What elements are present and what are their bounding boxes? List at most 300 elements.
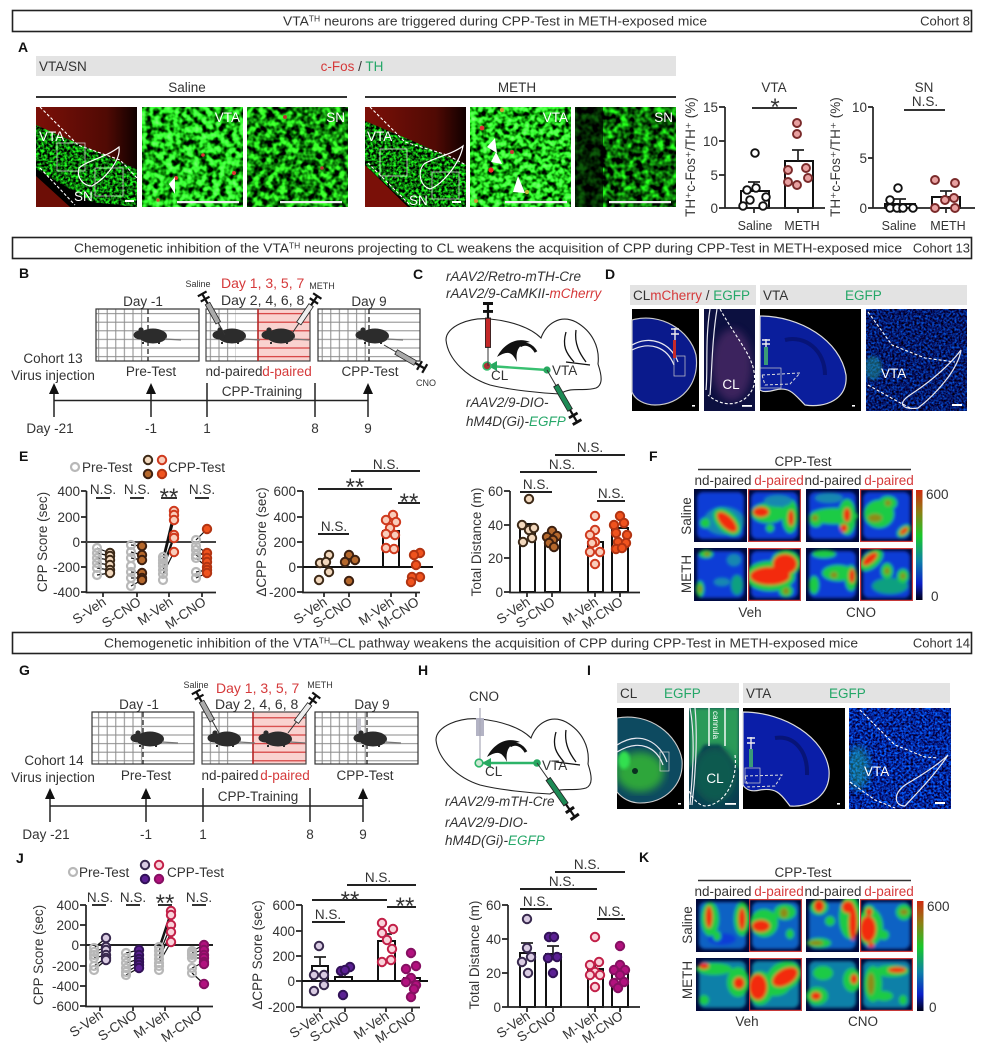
image: CL magnified with cannula [689,708,739,809]
panel F: occupancy heatmaps, cohort 13: nd-paired [694,473,752,488]
image: METH SN: SN [654,110,673,125]
heatmap: saline CNO nd-paired [806,899,859,952]
chart: CPP score: M-CNO [162,594,209,632]
chart: CPP score: N.S. [87,890,113,905]
chart: total distance: N.S. [598,904,624,919]
legend: CPP-Test [168,460,225,475]
chart: total distance: 0 [495,585,503,600]
chart: delta CPP score: N.S. [365,870,391,885]
chart: total distance: S-CNO [513,594,558,631]
chart: CPP score: 400 [57,484,80,499]
image: saline overview: VTA [39,129,64,144]
chart: CPP score: S-CNO [99,594,144,631]
panel B: experimental timeline, cohort 13: Pre-Test [126,364,176,379]
colour scale: 0 [931,589,939,604]
panel G: experimental timeline, cohort 14: CPP-Training [218,789,298,804]
chart: CPP score: CPP Score (sec) [35,492,50,592]
chamber: pre-test [92,712,194,764]
panel F: occupancy heatmaps, cohort 13: Veh [738,605,762,620]
chart: CPP score: M-Veh [135,594,176,628]
panel G: experimental timeline, cohort 14: Day -1 [119,697,159,712]
chart: total distance: M-CNO [579,594,626,632]
panel F: occupancy heatmaps, cohort 13: CPP-Test [774,454,832,469]
image: METH VTA: VTA [543,110,568,125]
heatmap: saline Veh d-paired [748,489,801,542]
panel K: occupancy heatmaps, cohort 14: METH [680,961,695,999]
image: saline overview: SN [74,189,93,204]
panel H: cannula and viral schematic, cohort 14: VTA [542,758,567,773]
panel A: micrographs: c-Fos / TH [321,59,383,74]
panel I: CL and VTA EGFP histology: EGFP [829,686,866,701]
image: VTA magnified [866,309,967,411]
chart: delta CPP score: ** [400,489,418,516]
panel G: experimental timeline, cohort 14: Virus injection [11,770,95,785]
chart: CPP score: 200 [57,510,80,525]
chart: CPP score: 400 [56,898,79,913]
panel G: experimental timeline, cohort 14: G [19,662,30,678]
heading: cohort 13 banner: TH [289,242,300,250]
panel G: experimental timeline, cohort 14: Day -21 [22,827,70,842]
heading: cohort 13 banner: Cohort 13 [913,240,970,256]
chart: total distance: N.S. [598,486,624,501]
image: saline VTA [142,107,243,207]
chart: delta CPP score: ** [341,887,359,914]
image: VTA magnified [849,708,951,809]
panel F: occupancy heatmaps, cohort 13: F [649,448,658,464]
timeline [49,383,373,417]
chart: delta CPP score: -200 [269,585,296,600]
panel F: occupancy heatmaps, cohort 13: d-paired [754,473,804,488]
chart: total distance: N.S. [523,894,549,909]
panel C: viral injection schematic, cohort 13: rAAV2/9-CaMKII-mCherry [446,286,603,301]
panel D: CL and VTA EGFP histology: CLmCherry / EGFP [633,288,750,303]
heading: cohort 8 banner: Cohort 8 [920,14,970,28]
panel J: CPP score charts, cohort 14 [16,850,640,1046]
chart: SN double-positive percentage: 5 [859,151,867,166]
panel H: cannula and viral schematic, cohort 14 [418,662,591,848]
chart: CPP score: S-Veh [70,594,109,627]
chart: total distance [467,857,640,1046]
heatmap: METH CNO nd-paired [806,548,859,601]
chart: total distance: 40 [488,518,503,533]
panel G: experimental timeline, cohort 14 [11,662,418,842]
panel G: experimental timeline, cohort 14: Cohort 14 [24,753,84,768]
chart: delta CPP score: S-CNO [310,594,355,631]
heading: cohort 13 banner: neurons projecting to CL weakens the acquisition of CPP during CPP-Test in METH-exposed mice [300,240,902,256]
image: VTA magnified: VTA [864,764,889,779]
panel B: experimental timeline, cohort 13: d-paired [262,364,312,379]
cannula [476,708,484,764]
image: METH VTA [470,107,571,207]
panel D: CL and VTA EGFP histology [605,266,967,411]
chart: delta CPP score: ΔCPP Score (sec) [254,487,269,597]
panel A: micrographs: Saline [168,80,206,95]
panel B: experimental timeline, cohort 13 [11,265,436,436]
panel K: occupancy heatmaps, cohort 14: d-paired [864,884,914,899]
chart: delta CPP score: S-Veh [287,1008,326,1041]
heatmap: METH Veh d-paired [748,548,801,601]
panel H: cannula and viral schematic, cohort 14: CL [485,764,503,779]
image: VTA section [743,708,845,809]
heading: cohort 8 banner: VTA [283,14,307,28]
icon: saline syringe [192,689,223,735]
panel B: experimental timeline, cohort 13: Day 1, 3, 5, 7 [221,275,304,291]
panel G: experimental timeline, cohort 14: -1 [140,827,152,842]
panel B: experimental timeline, cohort 13: CPP-Test [341,364,399,379]
chart: total distance: 60 [486,898,501,913]
chart: SN double-positive percentage: TH⁺c-Fos⁺/TH⁺ (%) [828,97,843,217]
panel G: experimental timeline, cohort 14: 9 [359,827,367,842]
panel D: CL and VTA EGFP histology: VTA [763,288,788,303]
panel G: experimental timeline, cohort 14: Day 2, 4, 6, 8 [215,696,298,712]
chart: delta CPP score: 400 [273,510,296,525]
panel C: viral injection schematic, cohort 13: hM4D(Gi)-EGFP [466,414,566,429]
panel B: experimental timeline, cohort 13: Day -21 [26,421,74,436]
heading: cohort 14 banner: TH [319,636,330,646]
chart: CPP score: N.S. [90,482,116,497]
panel D: CL and VTA EGFP histology: D [605,266,615,282]
chart: total distance: N.S. [549,457,575,472]
chart: delta CPP score: 600 [272,898,295,913]
chart: CPP score: M-CNO [158,1007,205,1045]
chart: delta CPP score: N.S. [315,907,341,922]
chart: delta CPP score: 600 [273,484,296,499]
chart: VTA double-positive percentage: TH⁺c-Fos⁺/TH⁺ (%) [683,97,698,217]
icon: METH syringe [284,692,320,736]
image: saline overview [36,107,137,207]
panel I: CL and VTA EGFP histology [587,662,951,809]
chart: total distance: M-Veh [560,594,601,628]
panel K: occupancy heatmaps, cohort 14: Veh [735,1014,759,1029]
heatmap: METH Veh d-paired [749,958,802,1011]
chart: delta CPP score: 400 [272,924,295,939]
chart: delta CPP score: -200 [268,1000,295,1015]
heatmap: METH Veh nd-paired [696,958,749,1011]
panel F: occupancy heatmaps, cohort 13: d-paired [864,473,914,488]
panel G: experimental timeline, cohort 14: nd-paired [201,768,259,783]
chart: CPP score: -200 [52,959,79,974]
panel D: CL and VTA EGFP histology: EGFP [845,288,882,303]
chart: delta CPP score: M-CNO [375,594,422,632]
panel F: occupancy heatmaps, cohort 13 [649,448,949,620]
chart: delta CPP score [250,870,428,1046]
chart: CPP score: 0 [72,535,80,550]
data points: saline [739,149,770,210]
panel A: micrographs: VTA/SN [39,59,87,74]
panel B: experimental timeline, cohort 13: 1 [203,421,211,436]
panel H: cannula and viral schematic, cohort 14: H [418,662,428,678]
panel A: micrographs [18,39,676,208]
icon: saline syringe [198,291,229,337]
chart: CPP score: ** [156,890,174,917]
heatmap: METH CNO nd-paired [806,958,859,1011]
heading: cohort 8 banner [12,10,972,32]
chart: delta CPP score: 0 [288,560,296,575]
chart: CPP score: -400 [53,585,80,600]
chart: delta CPP score: 200 [272,949,295,964]
chart: CPP score: N.S. [186,890,212,905]
panel K: occupancy heatmaps, cohort 14: nd-paired [694,884,752,899]
chart: total distance: N.S. [574,857,600,872]
panel K: occupancy heatmaps, cohort 14: CNO [848,1014,878,1029]
chart: total distance: N.S. [577,440,603,455]
heatmap: METH CNO d-paired [860,548,913,601]
chart: VTA double-positive percentage: 10 [703,134,718,149]
image: CL magnified with cannula: cannula [711,711,720,740]
panel B: experimental timeline, cohort 13: 9 [364,421,372,436]
panel B: experimental timeline, cohort 13: METH [309,281,335,291]
chart: total distance: 60 [488,484,503,499]
chart: total distance: N.S. [523,477,549,492]
timeline [45,788,368,822]
icon: green syringe [533,760,579,820]
heatmap: saline Veh nd-paired [696,899,749,952]
panel H: cannula and viral schematic, cohort 14: CNO [469,689,499,704]
data points: METH [931,176,959,212]
panel K: occupancy heatmaps, cohort 14: nd-paired [804,884,862,899]
legend: Pre-Test [79,865,130,880]
panel E: CPP score charts, cohort 13 [19,440,640,632]
colour scale: 0 [929,1000,937,1015]
chart: VTA double-positive percentage: Saline [738,219,772,233]
chart: CPP score: CPP Score (sec) [31,905,46,1005]
chart: VTA double-positive percentage: * [770,94,780,121]
panel B: experimental timeline, cohort 13: -1 [145,421,157,436]
VTA to CL projection [482,762,537,764]
chart: total distance: S-CNO [514,1008,559,1045]
chart: VTA double-positive percentage [683,80,825,233]
heading: cohort 14 banner: –CL pathway weakens the acquisition of CPP during CPP-Test in METH-exposed mice [330,636,858,650]
legend [71,456,225,478]
panel C: viral injection schematic, cohort 13: CL [491,368,509,383]
chart: CPP score [35,482,216,632]
panel B: experimental timeline, cohort 13: CNO [416,378,436,388]
panel G: experimental timeline, cohort 14: Pre-Test [121,768,171,783]
image: saline SN: SN [326,110,345,125]
panel H: cannula and viral schematic, cohort 14: hM4D(Gi)-EGFP [445,833,545,848]
panel I: CL and VTA EGFP histology: EGFP [664,686,701,701]
chart: CPP score: S-Veh [67,1007,106,1040]
image: saline VTA: VTA [215,110,240,125]
panel K: occupancy heatmaps, cohort 14: CPP-Test [774,865,832,880]
panel A: micrographs: A [18,39,28,55]
image: VTA section [760,309,861,411]
heading: cohort 14 banner [12,632,972,654]
panel G: experimental timeline, cohort 14: 8 [306,827,314,842]
panel I: CL and VTA EGFP histology: I [587,662,591,678]
icon: green syringe [543,368,581,425]
panel J: CPP score charts, cohort 14: J [16,850,24,866]
panel C: viral injection schematic, cohort 13: rAAV2/Retro-mTH-Cre [446,269,581,284]
chart: delta CPP score: N.S. [321,519,347,534]
heading: cohort 13 banner [12,238,972,258]
panel G: experimental timeline, cohort 14: METH [307,680,333,690]
panel H: cannula and viral schematic, cohort 14: rAAV2/9-DIO- [445,815,528,830]
heatmap: saline CNO nd-paired [806,489,859,542]
panel G: experimental timeline, cohort 14: d-paired [260,768,310,783]
image: CL magnified with cannula: CL [706,771,724,786]
chart: delta CPP score: ** [396,893,414,920]
chart: CPP score: M-Veh [131,1007,172,1041]
chart: delta CPP score: ** [346,474,364,501]
panel C: viral injection schematic, cohort 13: rAAV2/9-DIO- [466,395,549,410]
chart: SN double-positive percentage: 10 [852,100,867,115]
panel B: experimental timeline, cohort 13: Saline [185,279,211,289]
icon: METH syringe [287,293,321,338]
chart: total distance: Total Distance (m) [469,488,484,596]
chart: delta CPP score: 200 [273,535,296,550]
VTA to CL projection [489,366,547,370]
panel B: experimental timeline, cohort 13: CPP-Training [222,384,302,399]
panel H: cannula and viral schematic, cohort 14: rAAV2/9-mTH-Cre [445,794,555,809]
colour scale: 600 [926,487,949,502]
panel A: micrographs: METH [498,80,536,95]
chart: CPP score: N.S. [124,482,150,497]
chart: CPP score: N.S. [120,890,146,905]
panel I: CL and VTA EGFP histology: CL [620,686,638,701]
heading: cohort 8 banner: TH [309,14,320,24]
chamber: CPP-training [206,309,310,361]
panel K: occupancy heatmaps, cohort 14: d-paired [754,884,804,899]
chart: CPP score: S-CNO [95,1007,140,1044]
chart: SN double-positive percentage: Saline [882,219,916,233]
chart: total distance: S-Veh [494,1008,533,1041]
image: VTA magnified: VTA [881,366,906,381]
image: METH overview: VTA [367,129,392,144]
chart: CPP score: -600 [52,999,79,1014]
panel B: experimental timeline, cohort 13: nd-paired [205,364,263,379]
panel G: experimental timeline, cohort 14: Saline [183,680,209,690]
chamber: CPP-training [202,712,306,764]
heading: cohort 14 banner: Cohort 14 [913,636,970,650]
chart: total distance: 20 [488,551,503,566]
panel G: experimental timeline, cohort 14: Day 1, 3, 5, 7 [216,680,299,696]
chart: CPP score: ** [160,484,178,511]
heatmap: saline Veh d-paired [749,899,802,952]
image: METH SN [575,107,676,207]
chamber: CPP-test [318,309,420,361]
heading: cohort 13 banner: Chemogenetic inhibition of the VTA [74,240,277,256]
panel B: experimental timeline, cohort 13: Cohort 13 [23,351,83,366]
image: CL section [632,309,699,411]
heatmap: METH Veh nd-paired [694,548,747,601]
chart: delta CPP score [254,457,433,632]
chart: total distance: M-CNO [579,1008,626,1046]
chart: delta CPP score: M-Veh [351,1008,392,1042]
chart: SN double-positive percentage: METH [930,219,966,233]
chart: VTA double-positive percentage: VTA [761,80,787,95]
panel C: viral injection schematic, cohort 13 [413,266,603,429]
panel B: experimental timeline, cohort 13: B [19,265,29,281]
legend: CPP-Test [167,865,224,880]
chart: CPP score [31,890,213,1045]
panel G: experimental timeline, cohort 14: CPP-Test [336,768,394,783]
panel B: experimental timeline, cohort 13: Day -1 [123,294,163,309]
chamber: pre-test [96,309,199,361]
chart: SN double-positive percentage: 0 [859,201,867,216]
chart: total distance: Total Distance (m) [467,901,482,1009]
panel B: experimental timeline, cohort 13: Virus injection [11,368,95,383]
chart: total distance: S-Veh [494,594,533,627]
heading: cohort 8 banner: neurons are triggered during CPP-Test in METH-exposed mice [320,14,707,28]
chart: delta CPP score: S-CNO [307,1008,352,1045]
image: CL magnified: CL [722,377,740,392]
chamber: CPP-test [315,712,418,764]
chart: CPP score: 200 [56,918,79,933]
chart: CPP score: 0 [71,938,79,953]
panel C: viral injection schematic, cohort 13: C [413,266,423,282]
panel B: experimental timeline, cohort 13: 8 [311,421,319,436]
chart: delta CPP score: M-Veh [356,594,397,628]
image: METH overview [365,107,466,208]
chart: total distance: M-Veh [560,1008,601,1042]
heading: cohort 14 banner: Chemogenetic inhibition of the VTA [104,636,307,650]
chart: delta CPP score: N.S. [373,457,399,472]
image: saline SN [247,107,348,207]
panel K: occupancy heatmaps, cohort 14: K [639,849,649,865]
chart: delta CPP score: M-CNO [372,1008,419,1046]
legend [69,861,224,883]
chart: VTA double-positive percentage: 15 [703,100,718,115]
panel C: viral injection schematic, cohort 13: VTA [552,363,577,378]
heatmap: saline CNO d-paired [860,489,913,542]
panel E: CPP score charts, cohort 13: E [19,448,28,464]
chart: CPP score: N.S. [189,482,215,497]
image: CL magnified [704,309,755,411]
chart: VTA double-positive percentage: 0 [710,201,718,216]
panel F: occupancy heatmaps, cohort 13: Saline [679,497,694,535]
panel F: occupancy heatmaps, cohort 13: METH [679,555,694,593]
panel G: experimental timeline, cohort 14: Day 9 [354,697,390,712]
panel G: experimental timeline, cohort 14: 1 [199,827,207,842]
chart: VTA double-positive percentage: 5 [710,168,718,183]
icon: red syringe [483,303,493,366]
chart: total distance: N.S. [549,874,575,889]
panel F: occupancy heatmaps, cohort 13: nd-paired [804,473,862,488]
panel K: occupancy heatmaps, cohort 14: Saline [680,906,695,944]
legend: Pre-Test [82,460,133,475]
brain outline [446,319,601,394]
panel B: experimental timeline, cohort 13: Day 9 [351,294,387,309]
image: CL section [617,708,684,809]
chart: CPP score: -200 [53,560,80,575]
panel I: CL and VTA EGFP histology: VTA [746,686,771,701]
icon: CNO syringe [382,341,427,373]
chart: total distance: 20 [486,966,501,981]
heatmap: METH CNO d-paired [860,958,913,1011]
chart: total distance [469,440,640,632]
chart: SN double-positive percentage [828,80,975,233]
chart: SN double-positive percentage: N.S. [912,94,938,109]
panel B: experimental timeline, cohort 13: Day 2, 4, 6, 8 [221,292,304,308]
chart: total distance: 0 [493,1000,501,1015]
panel F: occupancy heatmaps, cohort 13: CNO [846,605,876,620]
chart: VTA double-positive percentage: METH [784,219,820,233]
chart: delta CPP score: ΔCPP Score (sec) [250,900,265,1010]
brain outline [436,719,591,794]
chart: delta CPP score: S-Veh [291,594,330,627]
chart: CPP score: -400 [52,979,79,994]
data points: saline [886,184,917,212]
colour scale [916,487,949,604]
panel K: occupancy heatmaps, cohort 14 [639,849,950,1029]
chart: SN double-positive percentage: SN [915,80,933,95]
colour scale: 600 [927,899,950,914]
heatmap: saline Veh nd-paired [694,489,747,542]
chart: total distance: 40 [486,932,501,947]
colour scale [917,899,950,1015]
image: METH overview: SN [409,193,428,208]
